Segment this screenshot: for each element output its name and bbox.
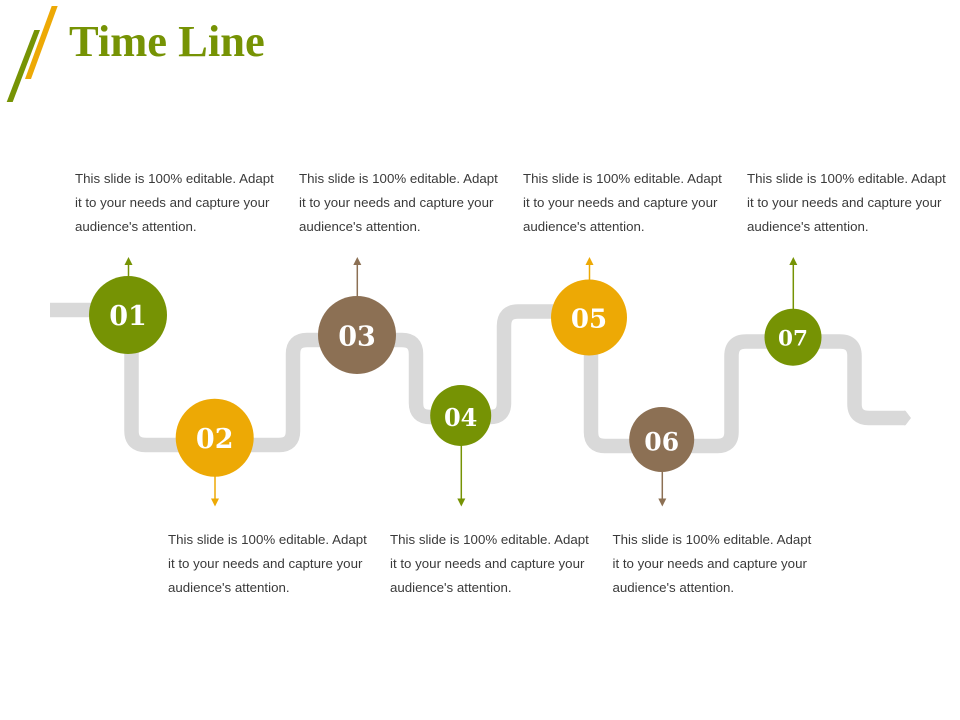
node 07: [764, 309, 822, 366]
text block 1: audience's attention.: [75, 219, 197, 234]
arrow 5: [586, 257, 594, 280]
node 03: [318, 296, 396, 374]
text block 3: audience's attention.: [299, 219, 421, 234]
text block 5: audience's attention.: [523, 219, 645, 234]
text block 1: This slide is 100% editable. Adapt: [75, 171, 274, 186]
arrow 2: [211, 476, 219, 506]
text block 2: audience's attention.: [168, 580, 290, 595]
node 06: [629, 407, 694, 472]
node 04: 04: [444, 403, 477, 432]
text block 1: [75, 171, 274, 234]
text block 3: it to your needs and capture your: [299, 195, 494, 210]
text block 3: [299, 171, 498, 234]
text block 7: This slide is 100% editable. Adapt: [747, 171, 946, 186]
text block 2: This slide is 100% editable. Adapt: [168, 532, 367, 547]
node 02: [176, 399, 254, 477]
text block 3: This slide is 100% editable. Adapt: [299, 171, 498, 186]
text block 7: audience's attention.: [747, 219, 869, 234]
timeline path: [50, 310, 911, 446]
arrow 4: [457, 445, 465, 506]
text block 6: This slide is 100% editable. Adapt: [612, 532, 812, 547]
text block 2: [168, 532, 367, 595]
text block 6: it to your needs and capture your: [612, 556, 807, 571]
text block 2: it to your needs and capture your: [168, 556, 363, 571]
node 06: 06: [644, 428, 679, 456]
node 01: [89, 276, 167, 354]
text block 4: audience's attention.: [390, 580, 512, 595]
text block 5: it to your needs and capture your: [523, 195, 718, 210]
text block 7: [747, 171, 946, 234]
text block 4: [390, 532, 589, 595]
text block 1: it to your needs and capture your: [75, 195, 270, 210]
node 05: [551, 280, 627, 356]
node 01: 01: [109, 301, 147, 332]
node 02: 02: [196, 424, 233, 455]
arrow 3: [353, 257, 361, 297]
node 03: 03: [338, 322, 376, 352]
text block 5: [523, 171, 722, 234]
arrow 7: [789, 257, 797, 310]
arrow 6: [658, 471, 666, 506]
logo: diagonal stripes: [7, 6, 58, 102]
text block 4: it to your needs and capture your: [390, 556, 585, 571]
text block 6: [612, 532, 812, 595]
title: Time Line: [69, 16, 265, 66]
node 07: 07: [778, 326, 808, 352]
text block 7: it to your needs and capture your: [747, 195, 942, 210]
text block 4: This slide is 100% editable. Adapt: [390, 532, 589, 547]
text block 6: audience's attention.: [612, 580, 734, 595]
arrow 1: [124, 257, 132, 277]
node 04: [430, 385, 491, 446]
text block 5: This slide is 100% editable. Adapt: [523, 171, 722, 186]
node 05: 05: [571, 304, 607, 334]
